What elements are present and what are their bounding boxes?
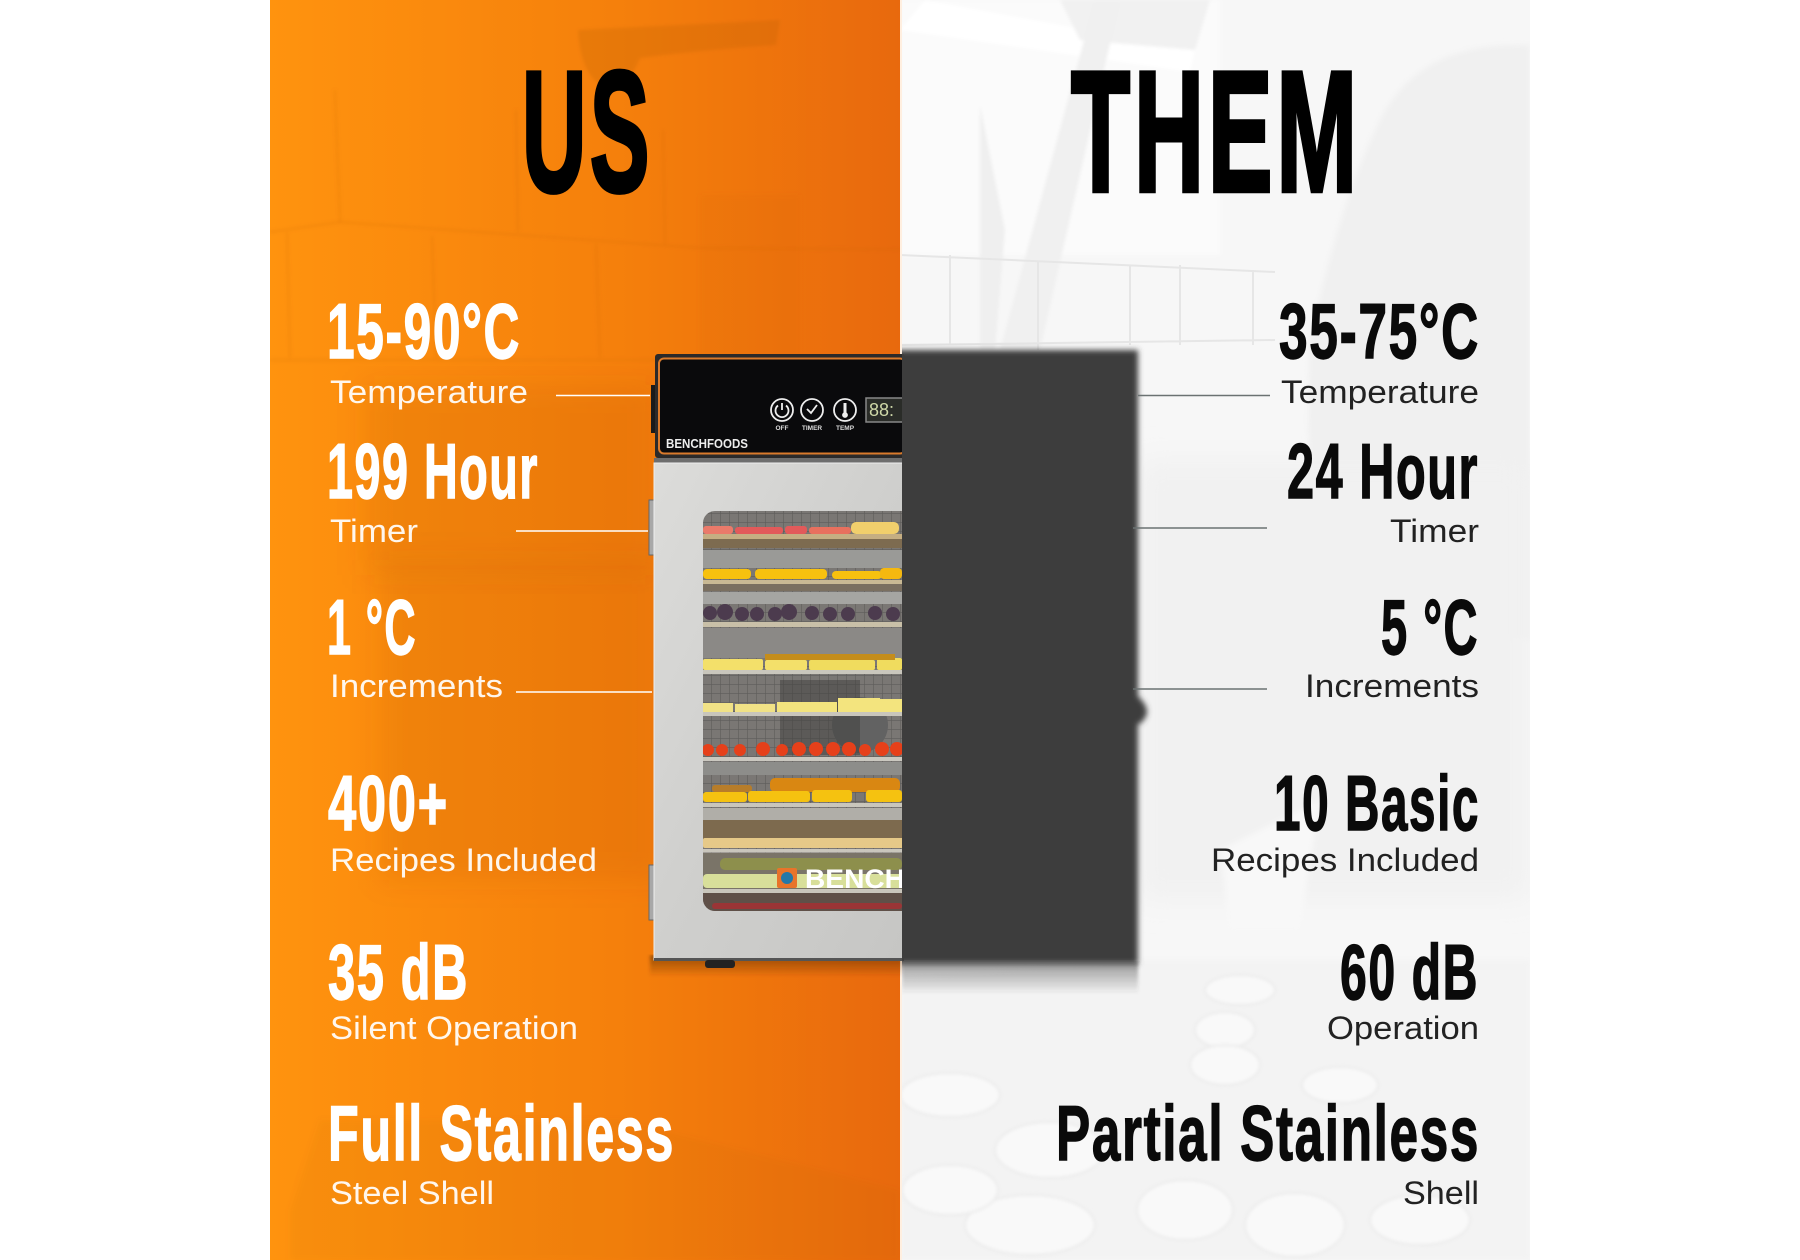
THEM stat: noise: Operation (1327, 1010, 1479, 1046)
tray 6 tomatoes (702, 742, 905, 761)
heading: THEM: THEM (1071, 36, 1361, 228)
steel shell (654, 458, 904, 968)
US stat: noise: 35 dB (328, 928, 469, 1016)
US stat: noise (328, 928, 578, 1046)
button labels (776, 425, 855, 432)
tray 4 pineapple (703, 654, 905, 674)
product shadow (650, 955, 902, 977)
window with food trays (702, 511, 905, 911)
THEM stat: shell (1056, 1089, 1480, 1211)
US stat: timer (327, 427, 539, 549)
tray 5 pineapple (703, 698, 905, 716)
THEM stat: temperature (1279, 287, 1480, 410)
red fruit row (712, 903, 902, 909)
US stat: noise: Silent Operation (330, 1010, 578, 1046)
US stat: increments: 1 °C (327, 583, 417, 671)
THEM stat: recipes: 10 Basic (1274, 759, 1480, 847)
US stat: temperature (327, 287, 528, 410)
THEM stat: increments: 5 °C (1381, 583, 1479, 671)
US stat: timer: Timer (330, 513, 418, 549)
tray 3 plums (703, 604, 905, 627)
tray 9 pears (703, 858, 905, 893)
US stat: increments: Increments (330, 668, 503, 704)
THEM stat: temperature: 35-75°C (1279, 287, 1480, 375)
panel: US orange background (270, 0, 960, 1260)
digital display (866, 398, 904, 422)
connector lines: THEM (1133, 396, 1270, 689)
heading: US: US (522, 36, 653, 228)
tray 8 apples (703, 838, 905, 852)
timer button (801, 399, 823, 421)
button labels: TEMP (836, 425, 855, 432)
temperature button (834, 399, 856, 421)
US stat: temperature: Temperature (330, 374, 528, 410)
tray 7 oranges (703, 778, 905, 807)
power button (771, 399, 793, 421)
THEM stat: increments (1305, 583, 1479, 704)
THEM stat: noise: 60 dB (1340, 928, 1479, 1016)
hinge brackets (649, 500, 655, 920)
connector lines: US (516, 396, 652, 692)
THEM stat: timer: 24 Hour (1287, 427, 1479, 515)
digital display: 88: (869, 400, 894, 420)
control panel (651, 354, 905, 458)
panel logo: BENCHFOODS (666, 437, 748, 451)
button labels: OFF (776, 425, 789, 432)
panel: THEM grey background (900, 0, 1530, 1260)
THEM stat: timer: Timer (1390, 513, 1479, 549)
US stat: recipes: 400+ (328, 759, 449, 847)
US stat: shell: Steel Shell (330, 1175, 494, 1211)
THEM stat: shell: Shell (1403, 1175, 1479, 1211)
tray 2 citrus (703, 568, 905, 591)
US stat: recipes: Recipes Included (330, 842, 597, 878)
THEM stat: timer (1287, 427, 1479, 549)
US stat: shell (328, 1089, 675, 1211)
US stat: temperature: 15-90°C (327, 287, 521, 375)
THEM stat: noise (1327, 928, 1479, 1046)
THEM stat: recipes (1211, 759, 1480, 878)
product: blacked-out competitor silhouette (880, 350, 1147, 994)
tray 1 apples (703, 522, 905, 548)
US stat: recipes (328, 759, 597, 878)
US stat: shell: Full Stainless (328, 1089, 675, 1177)
button labels: TIMER (802, 425, 822, 432)
THEM stat: increments: Increments (1305, 668, 1479, 704)
US stat: timer: 199 Hour (327, 427, 539, 515)
window logo: BENCH (805, 864, 905, 894)
THEM stat: recipes: Recipes Included (1211, 842, 1479, 878)
THEM stat: shell: Partial Stainless (1056, 1089, 1480, 1177)
THEM stat: temperature: Temperature (1281, 374, 1479, 410)
product: dehydrator photo half (649, 354, 905, 977)
US stat: increments (327, 583, 503, 704)
